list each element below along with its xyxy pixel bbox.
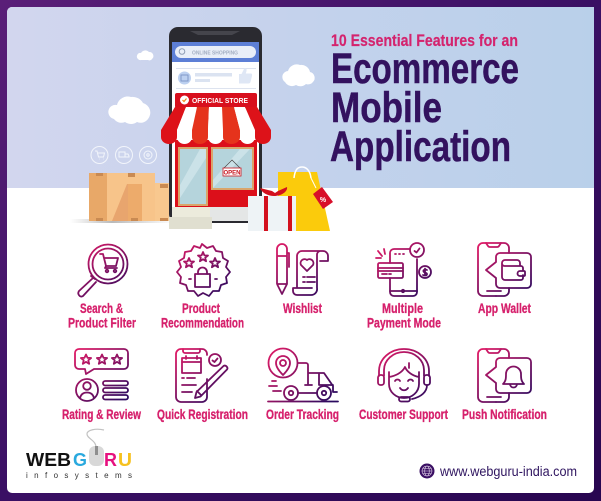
logo letter U: U	[118, 450, 132, 470]
label: push notification: Push Notification	[462, 407, 547, 422]
open sign	[223, 160, 241, 176]
label: rating and review: Rating & Review	[62, 407, 141, 422]
icon: push notification	[478, 349, 531, 402]
icon: order tracking	[268, 348, 338, 402]
logo tagline: infosystems	[26, 471, 132, 480]
storefront wall	[175, 140, 257, 207]
title block	[330, 31, 519, 171]
label: wishlist: Wishlist	[283, 301, 322, 316]
logo mouse	[89, 446, 104, 466]
icon: quick registration	[176, 349, 227, 402]
service icon circles	[91, 146, 156, 164]
label: product recommendation: Product	[182, 301, 220, 316]
steps	[169, 207, 212, 229]
phone screen	[172, 42, 259, 221]
label: product recommendation	[161, 301, 244, 330]
icon: multiple payment mode	[376, 243, 431, 296]
label: search and product filter	[68, 301, 137, 330]
icon: customer support	[378, 349, 430, 402]
cloud: left	[108, 96, 150, 124]
label: app wallet: App Wallet	[478, 301, 531, 316]
cloud: small	[137, 50, 153, 60]
label: order tracking: Order Tracking	[266, 407, 339, 422]
webguru logo	[26, 429, 132, 480]
store base	[209, 207, 259, 221]
official store banner	[175, 93, 257, 108]
logo word WEB: WEB	[26, 450, 71, 470]
website url: www.webguru-india.com	[439, 464, 577, 479]
phone body	[169, 27, 262, 223]
ground shadows	[70, 219, 175, 223]
sky banner	[7, 7, 594, 188]
title line 2: Mobile	[331, 84, 442, 132]
gift box	[248, 187, 296, 231]
awning	[161, 107, 271, 144]
open sign: OPEN	[223, 170, 241, 176]
icon: rating and review	[75, 349, 128, 401]
label: customer support: Customer Support	[359, 407, 448, 422]
title kicker: 10 Essential Features for an	[331, 31, 518, 50]
label: product recommendation: Recommendation	[161, 316, 244, 330]
title line 3: Application	[330, 123, 511, 171]
logo mouse cord	[87, 429, 104, 449]
search pill: ONLINE SHOPPING	[192, 50, 238, 56]
label: multiple payment mode: Payment Mode	[367, 316, 441, 330]
official store banner: OFFICIAL STORE	[192, 98, 248, 105]
price tag	[313, 187, 333, 209]
title line 1: Ecommerce	[331, 45, 519, 93]
product row	[176, 68, 256, 89]
right window	[211, 147, 254, 190]
price tag: %	[320, 197, 327, 204]
website link	[420, 464, 577, 479]
left window	[178, 147, 208, 206]
search pill	[175, 46, 256, 58]
label: multiple payment mode	[367, 301, 441, 330]
search header	[172, 42, 259, 62]
icon: app wallet	[478, 243, 531, 296]
phone speaker	[190, 31, 240, 35]
label: search and product filter: Product Filter	[68, 316, 137, 330]
label: quick registration: Quick Registration	[157, 407, 248, 422]
cardboard boxes	[89, 173, 169, 221]
cloud: right	[282, 64, 315, 86]
icon: wishlist	[277, 244, 328, 295]
label: multiple payment mode: Multiple	[382, 301, 423, 316]
logo letter R: R	[104, 450, 117, 470]
logo letter G: G	[73, 450, 87, 470]
hero illustration: mobile storefront	[70, 27, 333, 231]
icon: globe	[420, 464, 434, 478]
icon: product recommendation	[177, 244, 230, 296]
icon: search and product filter	[78, 244, 128, 297]
shopping bag	[278, 167, 330, 231]
label: search and product filter: Search &	[80, 301, 123, 316]
